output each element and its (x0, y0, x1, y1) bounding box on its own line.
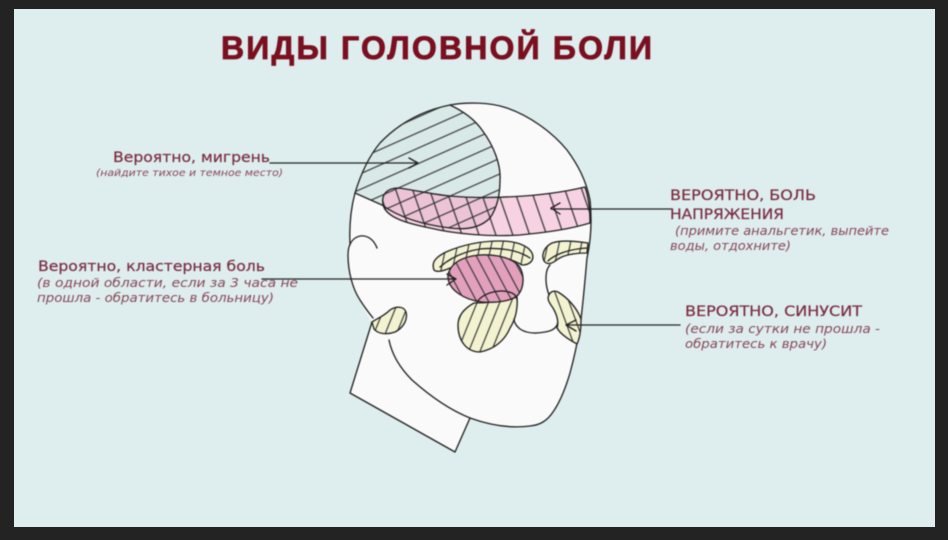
label: sinusitis: (если за сутки не прошла - (685, 322, 880, 336)
title: ВИДЫ ГОЛОВНОЙ БОЛИ (221, 30, 652, 66)
label: tension headache: ВЕРОЯТНО, БОЛЬ (670, 188, 816, 204)
label: cluster headache: Вероятно, кластерная боль (38, 259, 265, 275)
arrow: tension headache (551, 203, 672, 214)
ear lobe zone (372, 307, 406, 334)
label: tension headache: (примите анальгетик, выпейте (675, 224, 889, 238)
left brow zone (433, 241, 533, 271)
diagram: head with pain zones (348, 103, 591, 452)
label: sinusitis: ВЕРОЯТНО, СИНУСИТ (685, 304, 863, 320)
label: sinusitis: обратитесь к врачу) (685, 337, 827, 351)
label: sinusitis (685, 304, 880, 351)
head silhouette (348, 103, 591, 452)
arrow: migraine (270, 158, 418, 168)
label: cluster headache: (в одной области, если за 3 часа не (37, 276, 298, 290)
label: tension headache: воды, отдохните) (670, 239, 791, 253)
cheek zone (458, 297, 517, 352)
migraine zone (355, 105, 500, 229)
label: cluster headache (37, 259, 298, 305)
right brow zone (543, 241, 588, 264)
arrow: cluster headache (262, 274, 456, 285)
arrow: sinusitis (566, 320, 680, 331)
label: tension headache (670, 188, 889, 253)
cluster headache zone (448, 255, 523, 302)
sinus zone right cheek (548, 291, 581, 344)
jaw line (389, 340, 470, 418)
ear (348, 236, 377, 318)
label: tension headache: НАПРЯЖЕНИЯ (670, 207, 784, 223)
head outline (350, 103, 591, 452)
label: migraine: (найдите тихое и темное место) (96, 168, 283, 179)
label: cluster headache: прошла - обратитесь в больницу) (37, 291, 274, 305)
label: migraine: Вероятно, мигрень (113, 150, 270, 166)
nose (514, 265, 558, 333)
tension headache band (355, 105, 590, 236)
label: migraine (96, 150, 283, 179)
